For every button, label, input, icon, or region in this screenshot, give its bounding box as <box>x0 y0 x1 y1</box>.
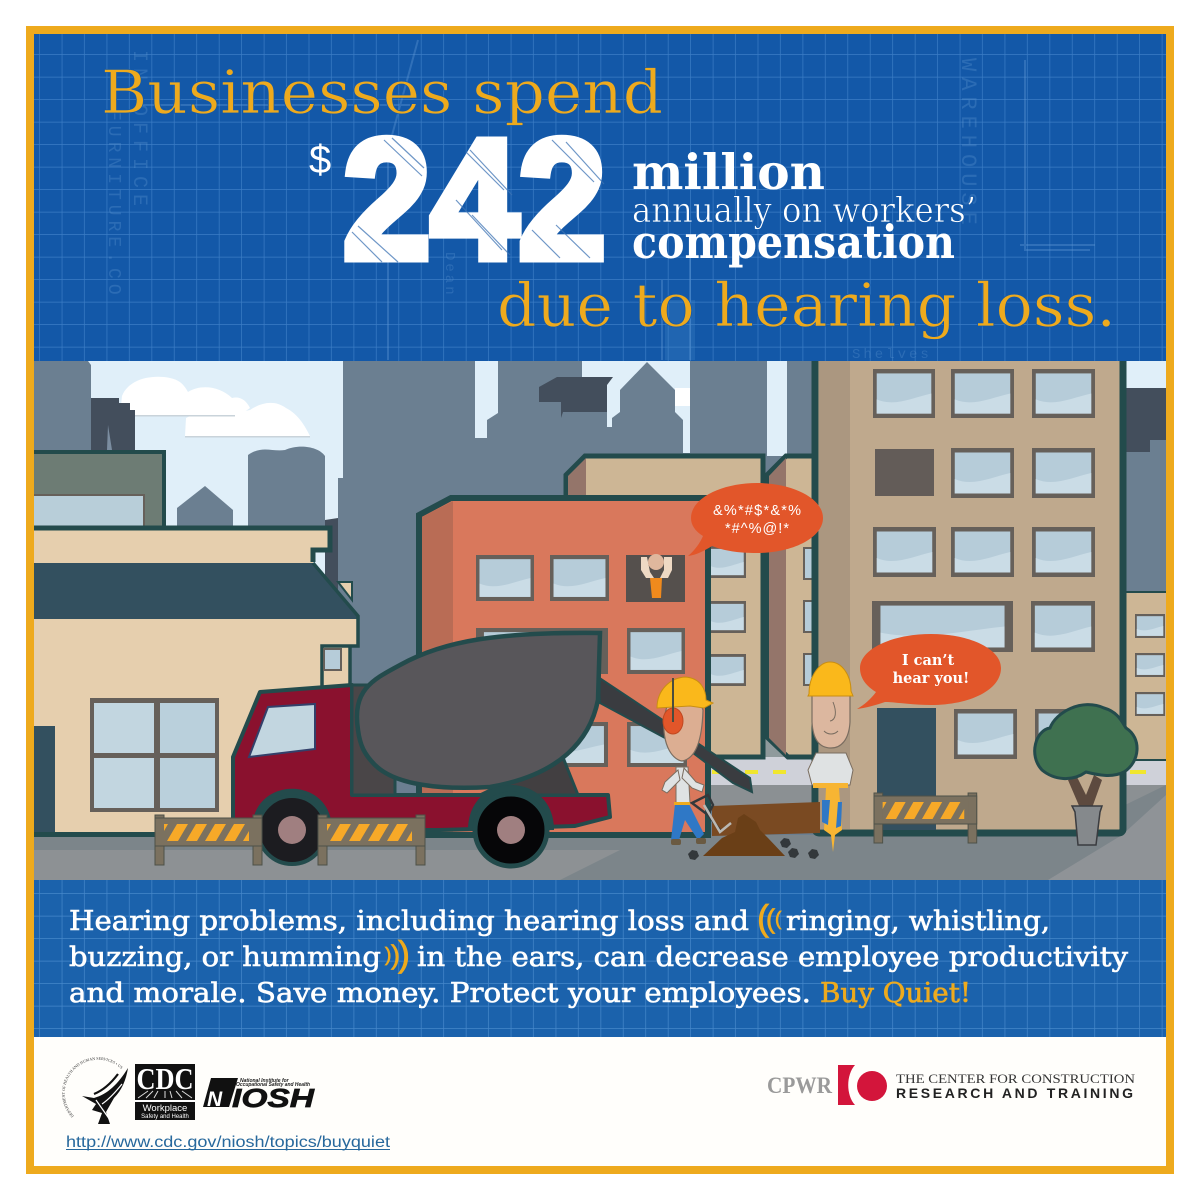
opening sound arcs: ( <box>775 909 782 930</box>
beige foreground building <box>30 528 358 837</box>
dark skyline pieces <box>91 377 1166 590</box>
text: annually on workers': annually on workers’ <box>632 191 976 231</box>
green building <box>28 452 164 532</box>
text: million: million <box>632 143 825 201</box>
logo: CPWR: THE CENTER FOR CONSTRUCTION <box>896 1072 1135 1086</box>
far right small building <box>1126 591 1166 761</box>
blueprint ghost labels: Shelves <box>852 347 932 363</box>
truck cab <box>233 685 610 830</box>
large tan building <box>815 350 1123 833</box>
heading: Businesses spend: Businesses spend <box>101 58 663 128</box>
building base line <box>600 832 708 837</box>
link: http://www.cdc.gov/niosh/topics/buyquiet <box>66 1134 391 1151</box>
sky gaps between towers <box>475 361 787 456</box>
red brick building <box>419 498 708 835</box>
ground <box>34 785 1166 880</box>
logo: CDC workplace: CDC <box>136 1061 194 1096</box>
blueprint ghost labels: WAREHOUSE <box>955 58 980 231</box>
mixer drum <box>357 633 600 788</box>
closing sound arcs: ) <box>385 945 391 966</box>
worker with jackhammer <box>808 662 853 852</box>
mixer frame <box>352 685 395 795</box>
road barriers <box>155 793 977 865</box>
logo: HHS eagle: DEPARTMENT OF HEALTH AND HUMAN SERVICES • USA <box>62 1057 122 1118</box>
logo: CPWR: RESEARCH AND TRAINING <box>896 1085 1133 1101</box>
speech bubble: curse symbols <box>688 483 823 556</box>
cab window <box>249 704 315 757</box>
panel: blueprint headline <box>34 34 1166 363</box>
person shouting in window <box>626 554 685 602</box>
opening sound arcs <box>757 897 782 938</box>
message line 2: in the ears, can decrease employee productivity <box>417 942 1129 973</box>
clouds <box>120 377 690 438</box>
logo: NIOSH: IOSH <box>232 1083 316 1113</box>
distant skyline <box>34 361 1166 841</box>
logo: CDC workplace: Workplace <box>143 1103 187 1114</box>
logo: CPWR: CPWR <box>767 1073 832 1098</box>
speech bubble: curse symbols: *#^%@!* <box>725 521 789 537</box>
speech bubble: I can't hear you: hear you! <box>893 670 969 687</box>
logo: NIOSH <box>203 1078 316 1113</box>
logo: NIOSH: National Institute for <box>240 1078 290 1084</box>
front wheel <box>252 789 332 864</box>
message line 3: Buy Quiet! <box>820 978 971 1009</box>
text: compensation: compensation <box>632 215 955 269</box>
closing sound arcs: ) <box>391 940 400 970</box>
logo: NIOSH: N <box>207 1088 223 1111</box>
message line 1: Hearing problems, including hearing loss and <box>69 906 749 937</box>
blueprint ghost labels: FURNITURE.CO <box>103 110 123 300</box>
message line 2: buzzing, or humming <box>69 942 381 973</box>
sky <box>88 361 1166 574</box>
dollar sign: $ <box>309 138 331 182</box>
window with cross panes <box>90 698 219 812</box>
speech bubble: I can't hear you: I can’t <box>902 652 954 669</box>
big number 242: 242 <box>343 105 606 295</box>
speech bubble: I can't hear you <box>857 634 1001 709</box>
blueprint ghost labels: IN OFFICE <box>127 50 150 212</box>
cement mixer truck <box>233 633 752 866</box>
logo: CDC workplace <box>135 1061 195 1120</box>
message line 1 <box>69 906 1050 937</box>
blueprint ghost labels <box>103 40 1095 363</box>
message line 1: ringing, whistling, <box>786 906 1050 937</box>
logo: CDC workplace: Safety and Health <box>141 1114 189 1120</box>
message line 2 <box>69 942 1129 973</box>
logo: CPWR <box>767 1065 1135 1105</box>
panel: hearing problems message <box>34 880 1166 1037</box>
brown-sided mid building <box>767 456 815 757</box>
heading: due to hearing loss: due to hearing loss. <box>497 271 1116 341</box>
blueprint ghost labels: Dean <box>441 252 457 298</box>
road behind <box>711 739 1166 806</box>
trench and dirt pile <box>688 802 820 860</box>
logo: HHS eagle <box>62 1057 128 1124</box>
opening sound arcs: ( <box>766 904 775 934</box>
speech bubble: curse symbols: &%*#$*&*% <box>713 503 801 519</box>
rear wheel <box>468 785 554 866</box>
message line 3: and morale. Save money. Protect your employees. <box>69 978 811 1009</box>
logo: NIOSH: Occupational Safety and Health <box>236 1082 310 1088</box>
worker with earmuffs and shovel <box>657 677 731 845</box>
tree <box>1035 705 1137 845</box>
closing sound arcs <box>385 933 410 974</box>
opening sound arcs: ( <box>757 897 769 938</box>
truck chute <box>598 677 752 792</box>
beige mid building <box>566 456 763 757</box>
closing sound arcs: ) <box>398 933 410 974</box>
panel: construction street scene <box>28 350 1170 880</box>
